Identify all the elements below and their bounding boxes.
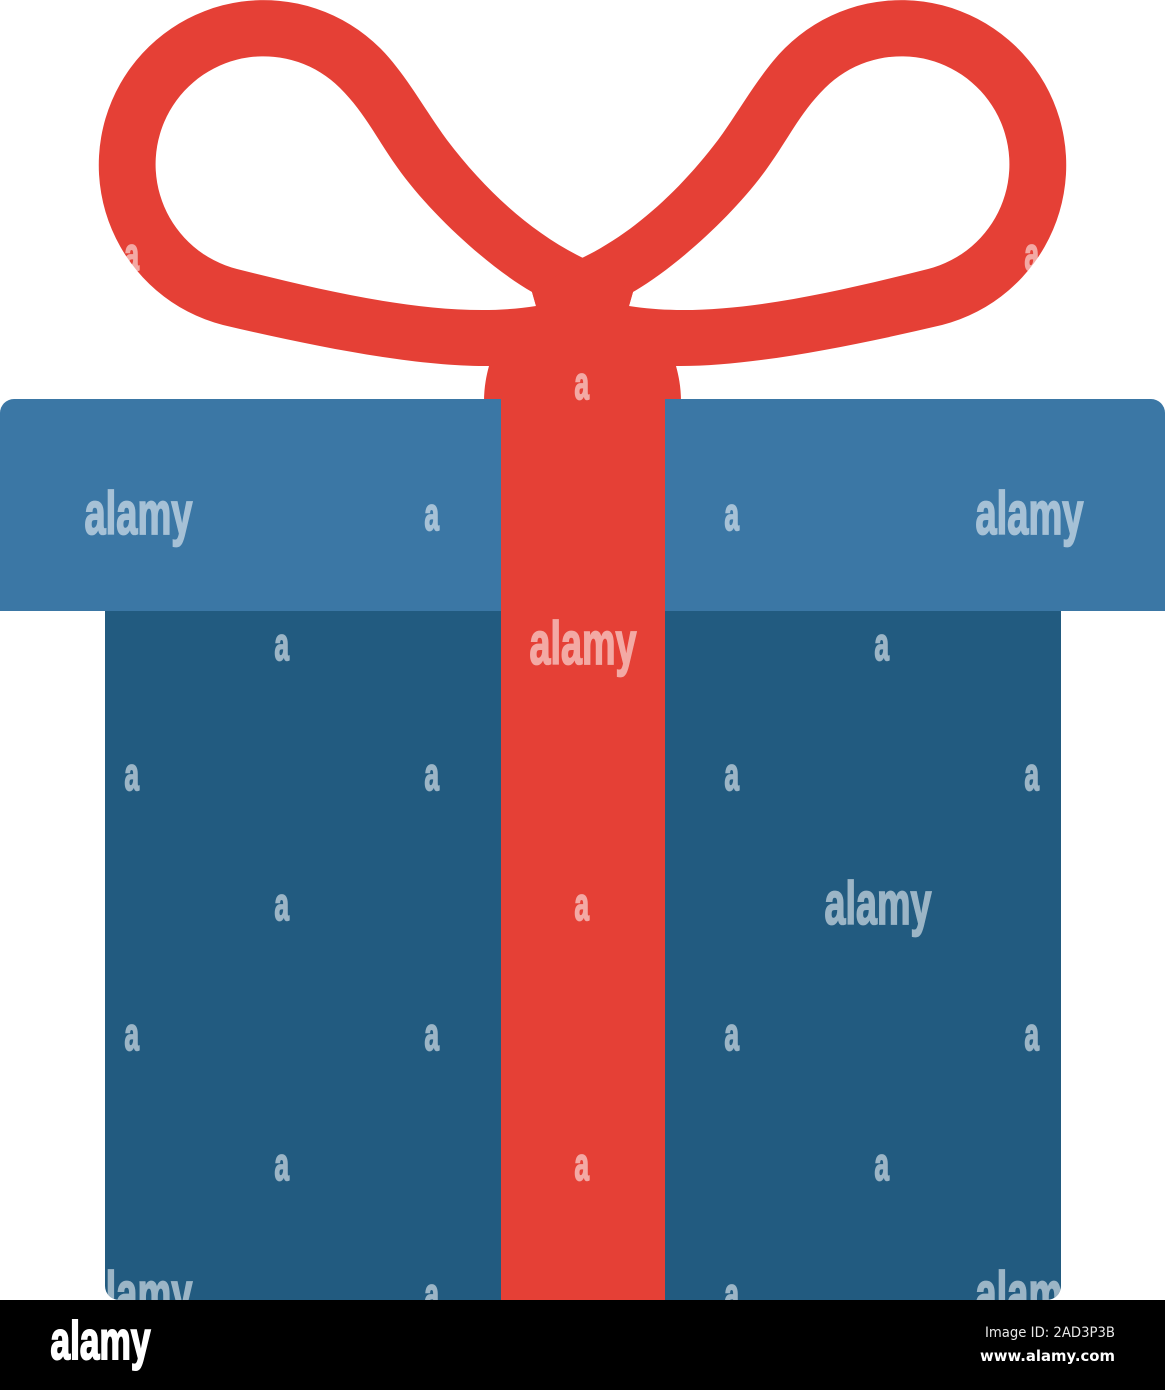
small repeating watermark letters xyxy=(124,228,1039,1190)
small repeating watermark letters: a xyxy=(724,488,739,540)
footer bar xyxy=(0,1300,1165,1390)
clipped bottom watermarks: alamy xyxy=(976,1260,1084,1327)
website: www.alamy.com xyxy=(980,1347,1115,1365)
small repeating watermark letters: a xyxy=(274,1138,289,1190)
vertical ribbon xyxy=(501,399,665,1300)
large watermark wordmarks: alamy xyxy=(530,610,637,677)
small repeating watermark letters: a xyxy=(574,1138,589,1190)
small repeating watermark letters: a xyxy=(424,488,439,540)
small repeating watermark letters: a xyxy=(574,878,589,930)
ribbon knot xyxy=(484,258,681,402)
small repeating watermark letters: a xyxy=(874,618,889,670)
right bow loop xyxy=(582,0,1066,367)
small repeating watermark letters: a xyxy=(724,748,739,800)
large watermark wordmarks xyxy=(84,480,1084,937)
footer logo: alamy xyxy=(50,1311,150,1371)
small repeating watermark letters: a xyxy=(1024,1008,1039,1060)
small repeating watermark letters: a xyxy=(724,1008,739,1060)
ribbon bow xyxy=(99,0,1066,402)
small repeating watermark letters: a xyxy=(424,748,439,800)
small repeating watermark letters: a xyxy=(574,357,589,409)
image id: Image ID: 2AD3P3B xyxy=(985,1325,1115,1341)
small repeating watermark letters: a xyxy=(274,878,289,930)
small repeating watermark letters: a xyxy=(124,1008,139,1060)
clipped bottom watermarks: a xyxy=(724,1268,739,1320)
clipped bottom watermarks xyxy=(108,1269,1060,1300)
box lid xyxy=(0,399,1165,611)
watermarks xyxy=(84,228,1084,1327)
small repeating watermark letters: a xyxy=(874,1138,889,1190)
small repeating watermark letters: a xyxy=(1024,748,1039,800)
clipped bottom watermarks: a xyxy=(424,1268,439,1320)
small repeating watermark letters: a xyxy=(274,618,289,670)
clipped bottom watermarks: alamy xyxy=(84,1260,193,1327)
small repeating watermark letters: a xyxy=(124,748,139,800)
large watermark wordmarks: alamy xyxy=(84,480,193,547)
small repeating watermark letters: a xyxy=(424,1008,439,1060)
small repeating watermark letters: a xyxy=(124,228,139,280)
large watermark wordmarks: alamy xyxy=(824,870,932,937)
box body xyxy=(105,611,1061,1300)
left bow loop xyxy=(99,0,583,367)
small repeating watermark letters: a xyxy=(1024,228,1039,280)
large watermark wordmarks: alamy xyxy=(976,480,1084,547)
